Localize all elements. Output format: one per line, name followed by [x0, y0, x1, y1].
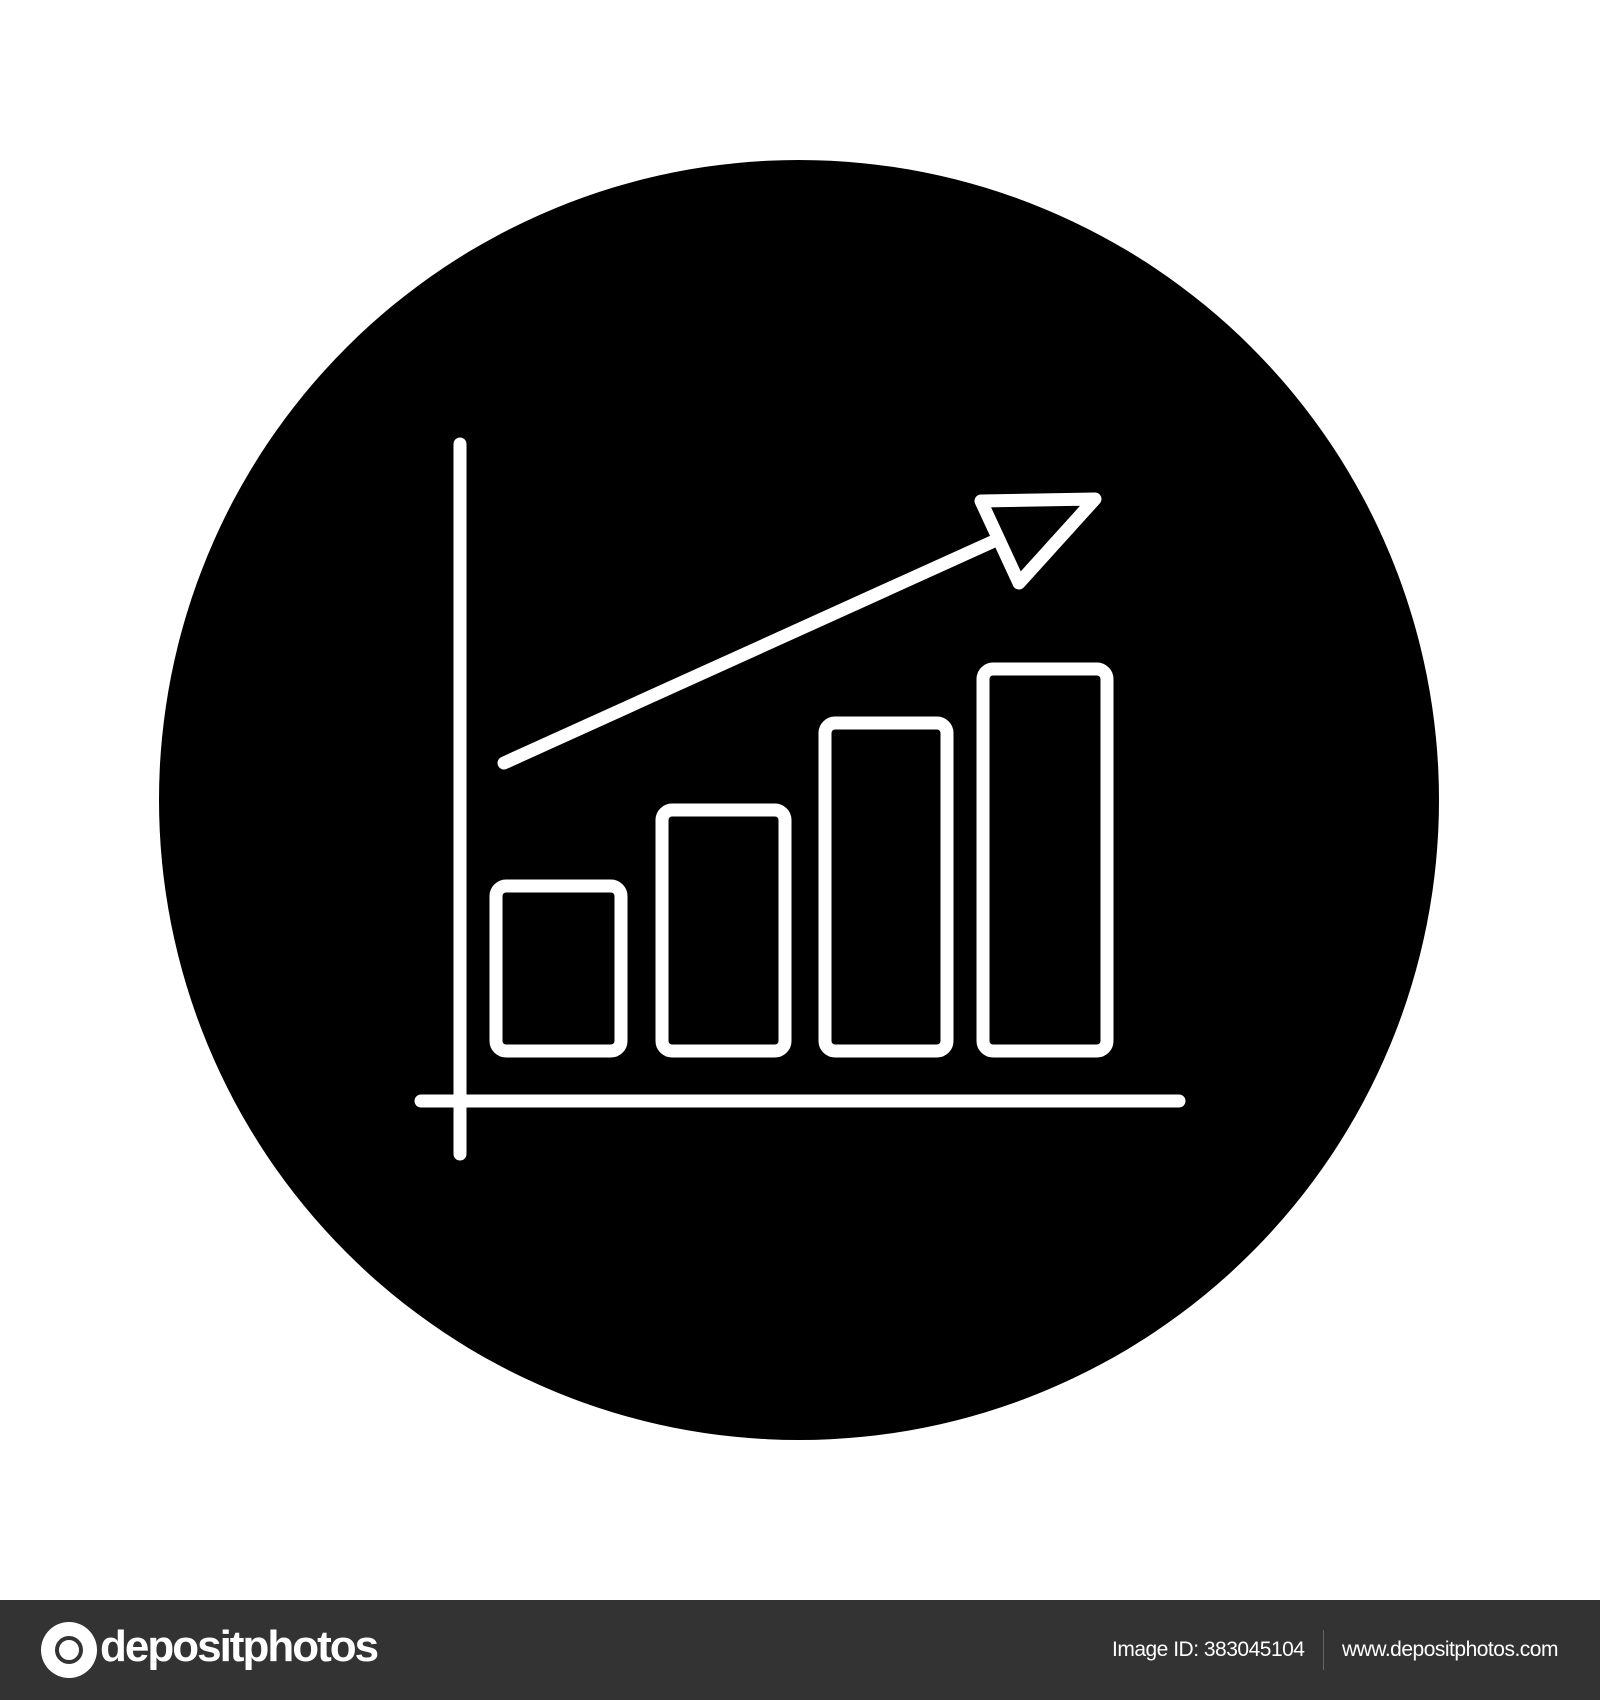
url: www.depositphotos.com	[1342, 1638, 1558, 1661]
footer bar	[0, 1600, 1600, 1700]
logo icon	[41, 1622, 97, 1678]
logo text: depositphotos	[100, 1622, 377, 1671]
image id: Image ID: 383045104	[1112, 1638, 1304, 1661]
